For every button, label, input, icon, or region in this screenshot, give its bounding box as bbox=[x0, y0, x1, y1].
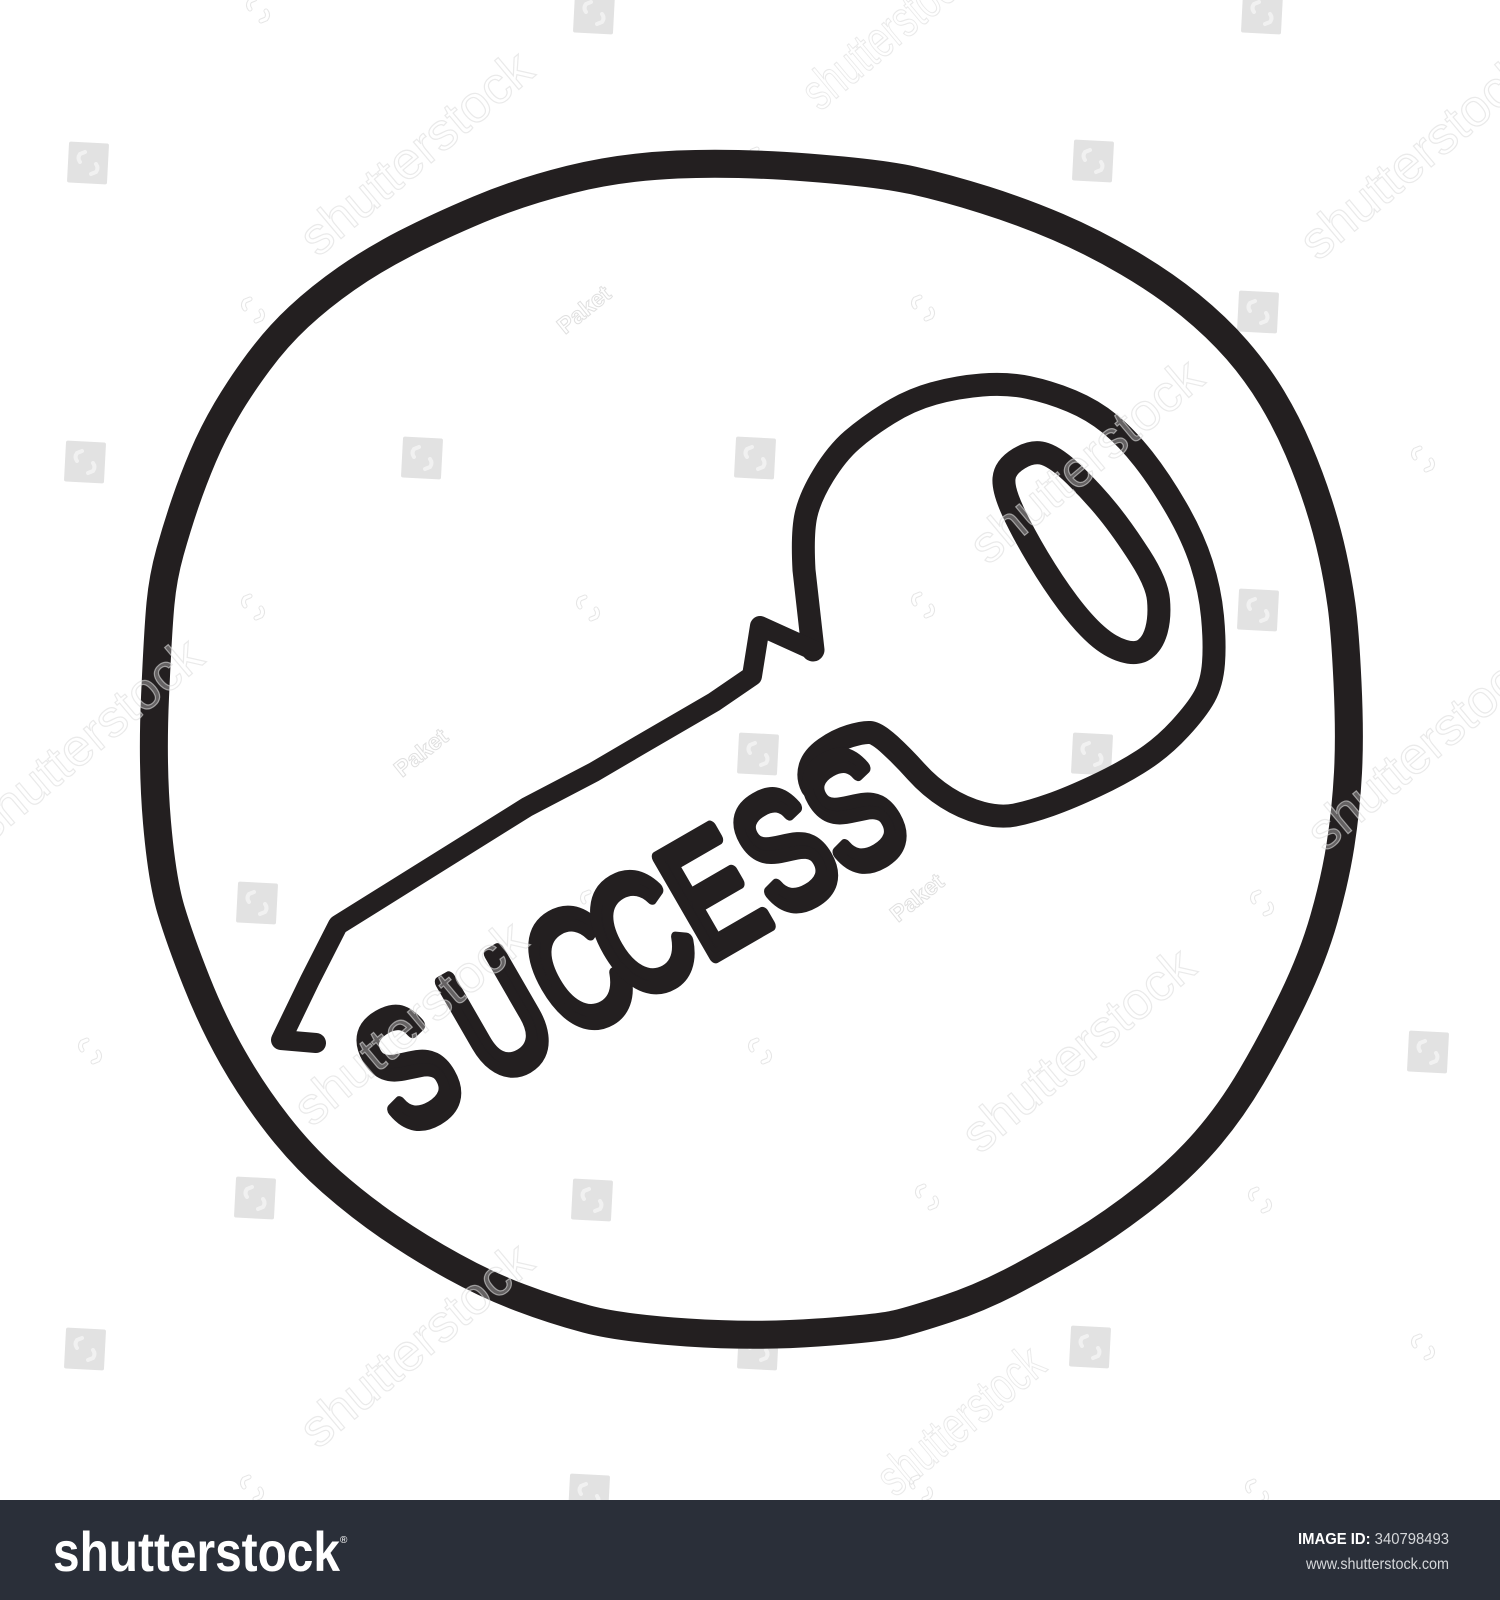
key head bbox=[803, 384, 1214, 816]
key slot bbox=[1004, 453, 1159, 653]
watermark text: shutterstock bbox=[865, 1334, 1056, 1507]
footer bar bbox=[0, 1500, 1500, 1600]
image id: IMAGE ID: 340798493 bbox=[1298, 1531, 1449, 1548]
footer logo: shutterstock bbox=[53, 1520, 341, 1583]
watermark names: Paket bbox=[552, 280, 616, 339]
watermark names: Paket bbox=[389, 723, 453, 782]
ring outline bbox=[154, 164, 1349, 1335]
registered mark: ® bbox=[340, 1535, 348, 1546]
site url: www.shutterstock.com bbox=[1305, 1556, 1449, 1573]
watermark text: shutterstock bbox=[958, 347, 1215, 575]
key shaft and teeth bbox=[281, 626, 813, 1043]
watermark text: shutterstock bbox=[288, 39, 545, 267]
watermark text: shutterstock bbox=[282, 909, 539, 1137]
watermark names bbox=[389, 280, 949, 927]
watermark text: shutterstock bbox=[950, 936, 1207, 1164]
icon: key bbox=[281, 384, 1214, 1043]
watermark names: Paket bbox=[885, 868, 949, 927]
watermark text: shutterstock bbox=[288, 1231, 545, 1459]
word: success: SUCCESS bbox=[327, 711, 934, 1168]
